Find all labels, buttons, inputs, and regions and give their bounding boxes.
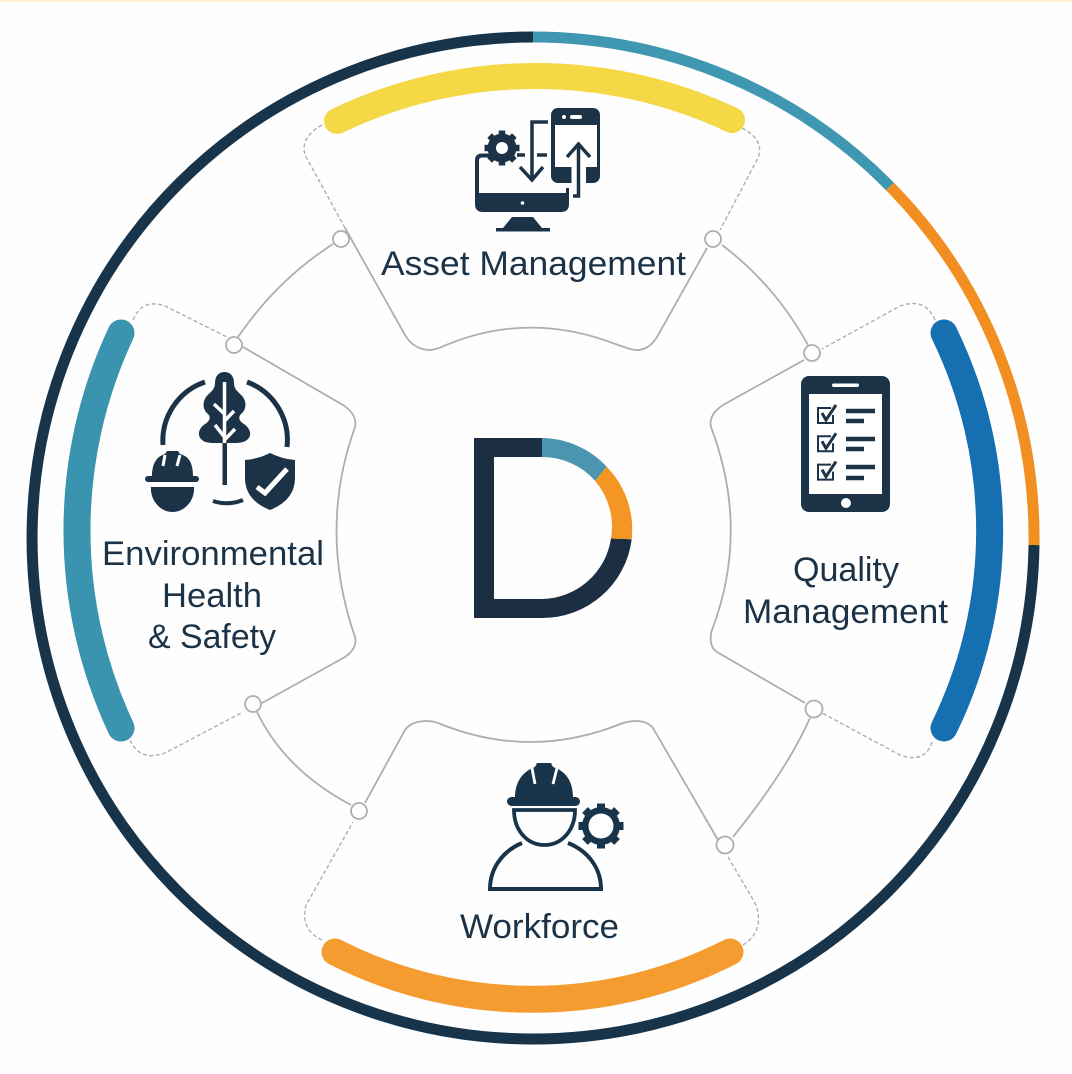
- icon: worker with gear: [490, 763, 624, 889]
- icon: tablet checklist: [801, 376, 890, 512]
- label: environmental health and safety: & Safety: [148, 618, 276, 656]
- label: environmental health and safety: [102, 535, 324, 656]
- label: quality management: [743, 551, 949, 631]
- icon: tree, helmet and shield: [145, 372, 295, 512]
- logo: D mark: [474, 438, 632, 618]
- label: workforce: Workforce: [460, 908, 619, 946]
- label: quality management: Management: [743, 593, 949, 631]
- label: quality management: Quality: [793, 551, 899, 589]
- label: environmental health and safety: Health: [162, 577, 262, 615]
- arc: quality management: [944, 333, 990, 728]
- label: asset management: Asset Management: [381, 245, 687, 283]
- label: environmental health and safety: Environmental: [102, 535, 324, 573]
- icon: monitor and phone sync: [475, 108, 600, 232]
- connector lines and panel outlines: [238, 228, 810, 840]
- arc: environmental health and safety: [77, 333, 121, 728]
- arc: asset management: [337, 76, 732, 121]
- arc: workforce: [335, 952, 730, 999]
- connector nodes: [226, 231, 822, 854]
